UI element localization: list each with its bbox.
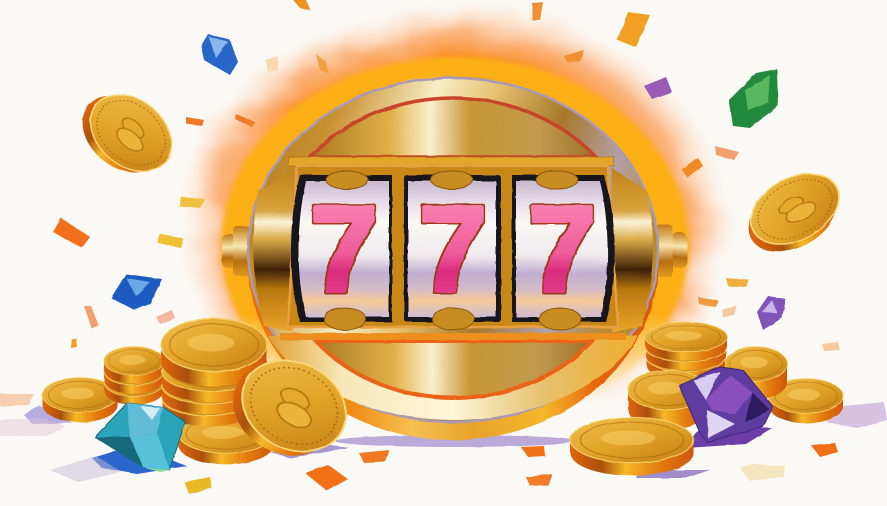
lower dome plate: [316, 341, 592, 398]
gem: purple: [679, 367, 773, 442]
front flat coin: [570, 417, 694, 476]
gem: purple small top: [644, 77, 672, 99]
back coin stack: [725, 347, 787, 399]
machine metal ring: [248, 78, 658, 422]
coin pile: right: [570, 322, 843, 476]
machine side knob: right: [656, 225, 687, 277]
flying coin: left: [67, 75, 187, 192]
paint shadows on the ground: [0, 402, 887, 482]
machine outer casing: [247, 76, 659, 440]
reel window frame: [288, 166, 618, 327]
back flat coin: [769, 379, 843, 423]
reel 3: [512, 171, 615, 330]
flying coin: right: [734, 160, 854, 266]
flat coin: [42, 378, 118, 422]
lower flat coin: [178, 415, 274, 464]
leaning coin: [217, 340, 362, 476]
digit 7: 7: [310, 181, 378, 317]
gem: blue left: [111, 274, 162, 310]
reel 2: [404, 171, 501, 330]
lower crescent of the ring: [268, 336, 638, 420]
machine side knob: left: [222, 226, 250, 276]
gem: purple small right: [757, 296, 786, 330]
upper dome plate: [310, 98, 596, 157]
window top band: [288, 157, 614, 166]
tall stack: [161, 319, 267, 426]
gem: teal: [95, 403, 185, 472]
orange sunburst halo: [183, 5, 732, 402]
coin pile: left: [42, 319, 362, 476]
gem: blue top: [201, 34, 238, 75]
gem: green: [729, 69, 778, 128]
middle stack: [104, 347, 164, 405]
slot machine: [222, 76, 687, 440]
digit 7: 7: [419, 181, 487, 317]
window bottom band: [280, 333, 626, 340]
lower stack: [628, 370, 708, 429]
side panels: [253, 168, 653, 332]
reel 1: [291, 171, 392, 330]
digit 7: 7: [528, 181, 596, 317]
right stack: [645, 322, 727, 380]
